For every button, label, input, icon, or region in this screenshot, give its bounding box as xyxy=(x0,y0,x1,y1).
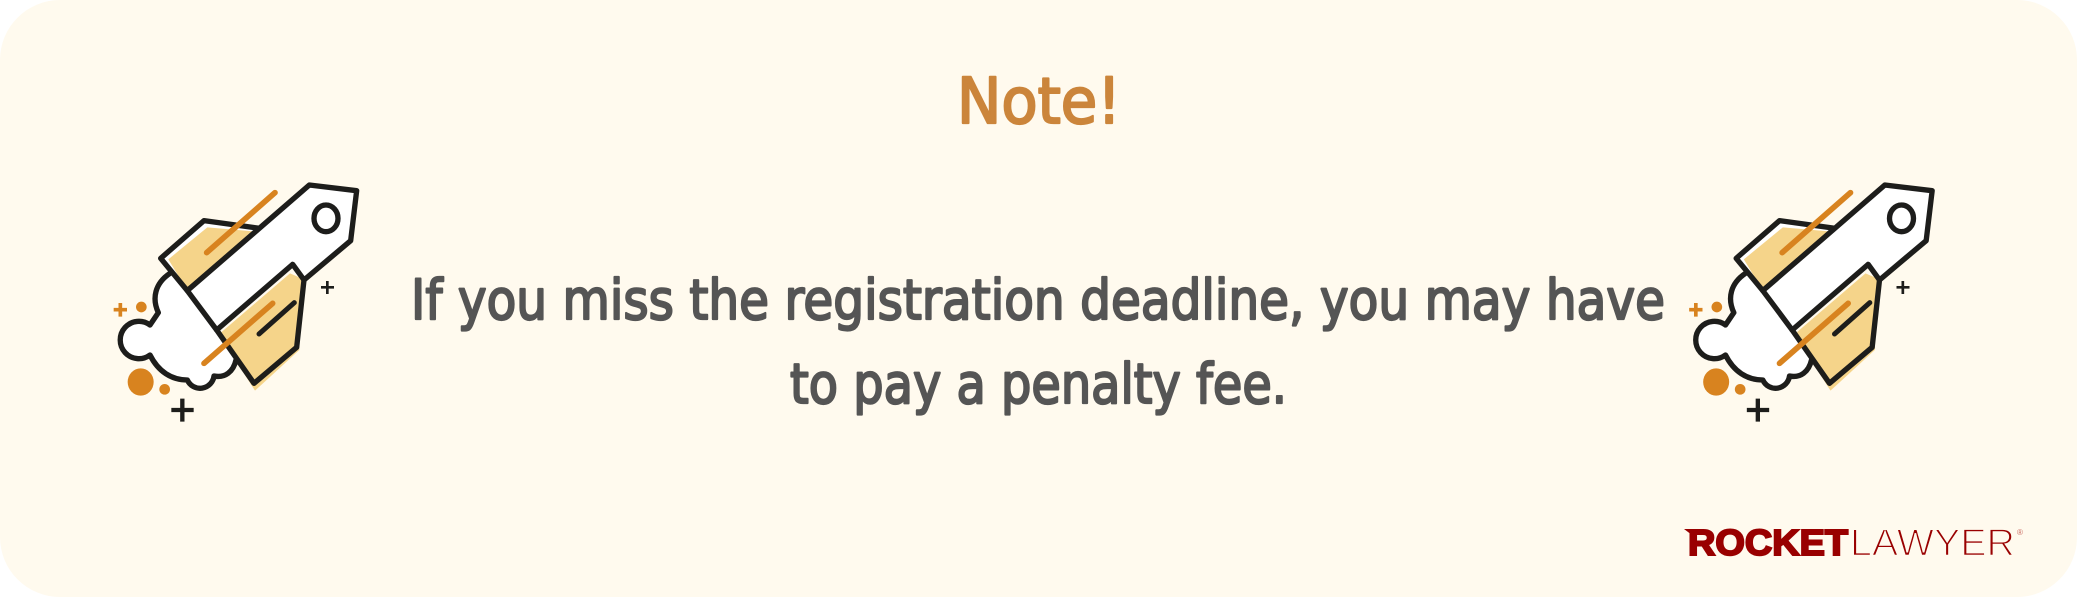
logo: Rocket Lawyer: ROCKET xyxy=(1688,522,1848,563)
text block: message: to pay a penalty fee. xyxy=(790,352,1287,416)
logo: Rocket Lawyer: ® xyxy=(2017,528,2023,537)
text block: message xyxy=(411,268,1665,416)
logo: Rocket Lawyer xyxy=(1684,522,2023,564)
text block: message: If you miss the registration deadline, you may have xyxy=(411,268,1665,332)
icon: right rocket xyxy=(1689,185,1932,422)
logo: Rocket Lawyer: LAWYER xyxy=(1850,522,2015,564)
title: Note! xyxy=(957,65,1121,138)
icon: left rocket xyxy=(114,185,357,422)
